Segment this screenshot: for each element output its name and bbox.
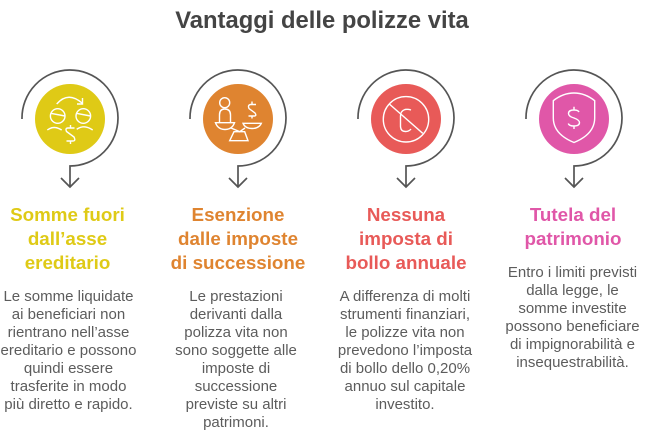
column 1 heading: Somme fuori: [10, 204, 125, 225]
column 4 text: insequestrabilità.: [516, 354, 629, 371]
column 1 text: rientrano nell’asse: [8, 324, 129, 341]
column 2 heading: Esenzione: [192, 204, 284, 225]
column 2 text: patrimoni.: [203, 414, 269, 431]
column 4 heading: [524, 204, 622, 249]
column 2 text: Le prestazioni: [189, 288, 283, 305]
title: Vantaggi delle polizze vita: [175, 7, 469, 34]
column 1 heading: [10, 204, 125, 273]
column 2 text: successione: [195, 378, 277, 395]
column 3 heading: imposta di: [359, 228, 453, 249]
column 4 text: Entro i limiti previsti: [508, 264, 637, 281]
column 3 text: strumenti finanziari,: [340, 306, 470, 323]
icon: orange circle with balance scale: [190, 70, 286, 187]
column 1 text: ai beneficiari non: [12, 306, 125, 323]
column 2 heading: [171, 204, 305, 273]
column 4 text: somme investite: [518, 300, 627, 317]
column 3 text: prevedono l’imposta: [338, 342, 472, 359]
column 2 text: polizza vita non: [184, 324, 288, 341]
column 2 text: [175, 288, 297, 431]
column 2 text: imposte di: [202, 360, 270, 377]
column 3 text: le polizze vita non: [345, 324, 465, 341]
column 2 text: sono soggette alle: [175, 342, 297, 359]
column 3 text: A differenza di molti: [340, 288, 470, 305]
column 4 text: [505, 264, 640, 371]
column 1 text: Le somme liquidate: [3, 288, 134, 305]
column 3 text: annuo sul capitale: [345, 378, 465, 395]
column 3 heading: [345, 204, 467, 273]
illustration: icons and arrows: [21, 69, 623, 188]
column 4 heading: Tutela del: [530, 204, 616, 225]
column 1 text: quindi essere: [24, 360, 113, 377]
column 2 heading: dalle imposte: [178, 228, 298, 249]
icon: yellow circle with people exchanging money: [22, 70, 118, 187]
column 4 text: dalla legge, le: [526, 282, 619, 299]
icon: red circle with crossed-out symbol: [358, 70, 454, 187]
column 1 text: trasferite in modo: [11, 378, 126, 395]
column 1 text: [1, 288, 136, 413]
column 3 heading: Nessuna: [367, 204, 445, 225]
column 2 text: previste su altri: [186, 396, 286, 413]
column 4 text: possono beneficiare: [505, 318, 640, 335]
column 3 heading: bollo annuale: [345, 252, 467, 273]
column 4 heading: patrimonio: [524, 228, 622, 249]
column 1 heading: dall’asse: [28, 228, 107, 249]
column 3 text: investito.: [375, 396, 435, 413]
column 4 text: di impignorabilità e: [510, 336, 635, 353]
icon: pink circle with shield and dollar: [526, 70, 622, 187]
column 1 text: più diretto e rapido.: [4, 396, 133, 413]
column 3 text: [338, 288, 472, 413]
column 3 text: di bollo dello 0,20%: [340, 360, 470, 377]
column 2 heading: di successione: [171, 252, 305, 273]
column 1 text: ereditario e possono: [1, 342, 136, 359]
column 2 text: derivanti dalla: [190, 306, 282, 323]
column 1 heading: ereditario: [25, 252, 110, 273]
